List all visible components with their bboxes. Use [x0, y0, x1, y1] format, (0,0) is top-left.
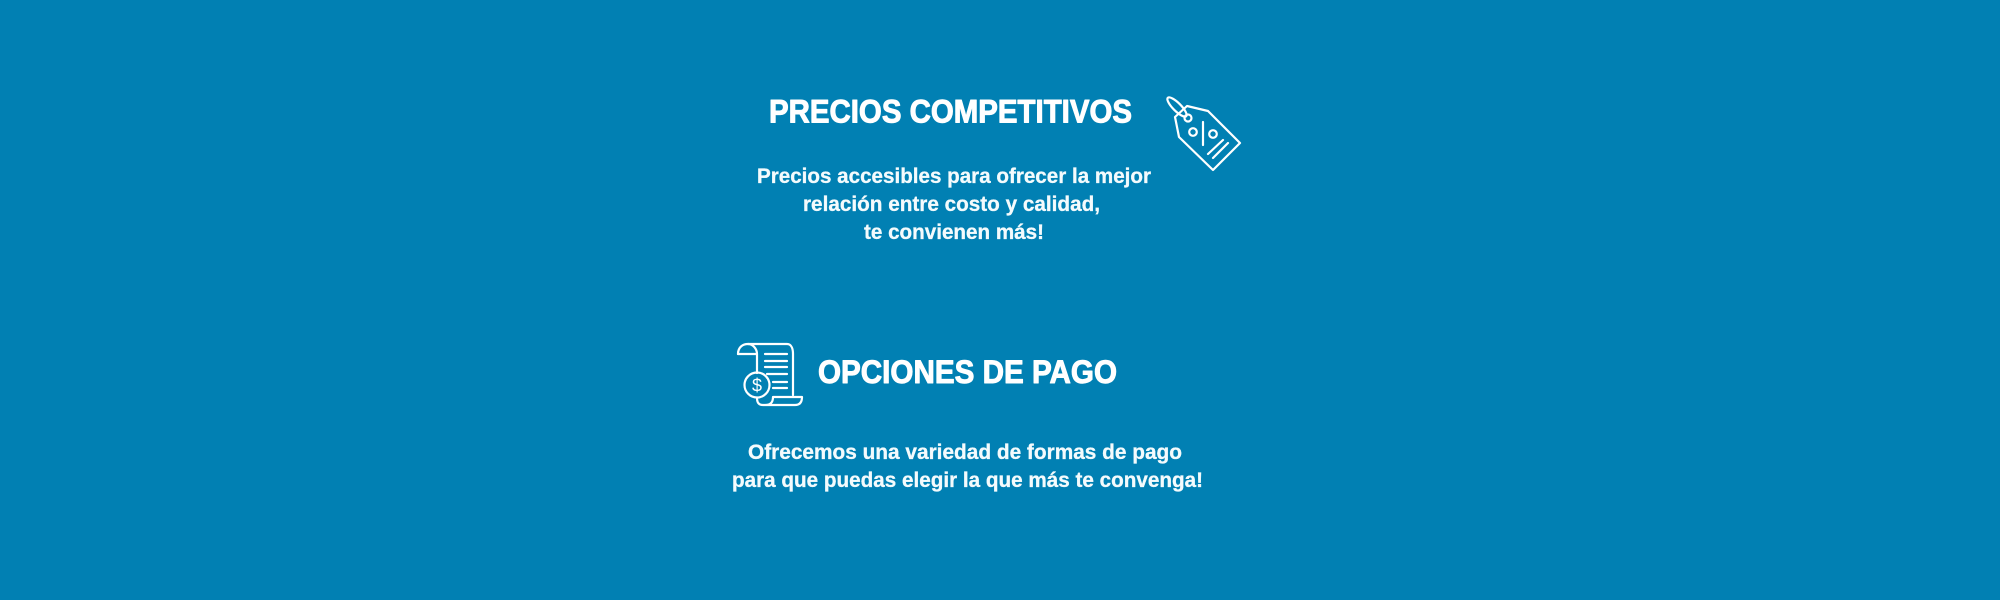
- text: precios description: Precios accesibles para ofrecer la mejor: [757, 165, 1151, 188]
- panel: precios competitivos: [757, 94, 1240, 244]
- heading: precios competitivos: PRECIOS COMPETITIVOS: [769, 94, 1132, 130]
- text: precios description: relación entre costo y calidad,: [803, 193, 1100, 216]
- text: pago description: Ofrecemos una variedad de formas de pago: [748, 441, 1182, 464]
- icon: price tag: [1165, 95, 1240, 170]
- heading: opciones de pago: OPCIONES DE PAGO: [818, 354, 1117, 390]
- text: precios description: [757, 165, 1151, 244]
- panel: opciones de pago: [732, 344, 1203, 492]
- text: pago description: para que puedas elegir la que más te convenga!: [732, 469, 1203, 492]
- text: pago description: [732, 441, 1203, 492]
- icon: payment receipt: $: [752, 376, 762, 396]
- text: precios description: te convienen más!: [864, 221, 1044, 244]
- icon: payment receipt: [738, 344, 802, 405]
